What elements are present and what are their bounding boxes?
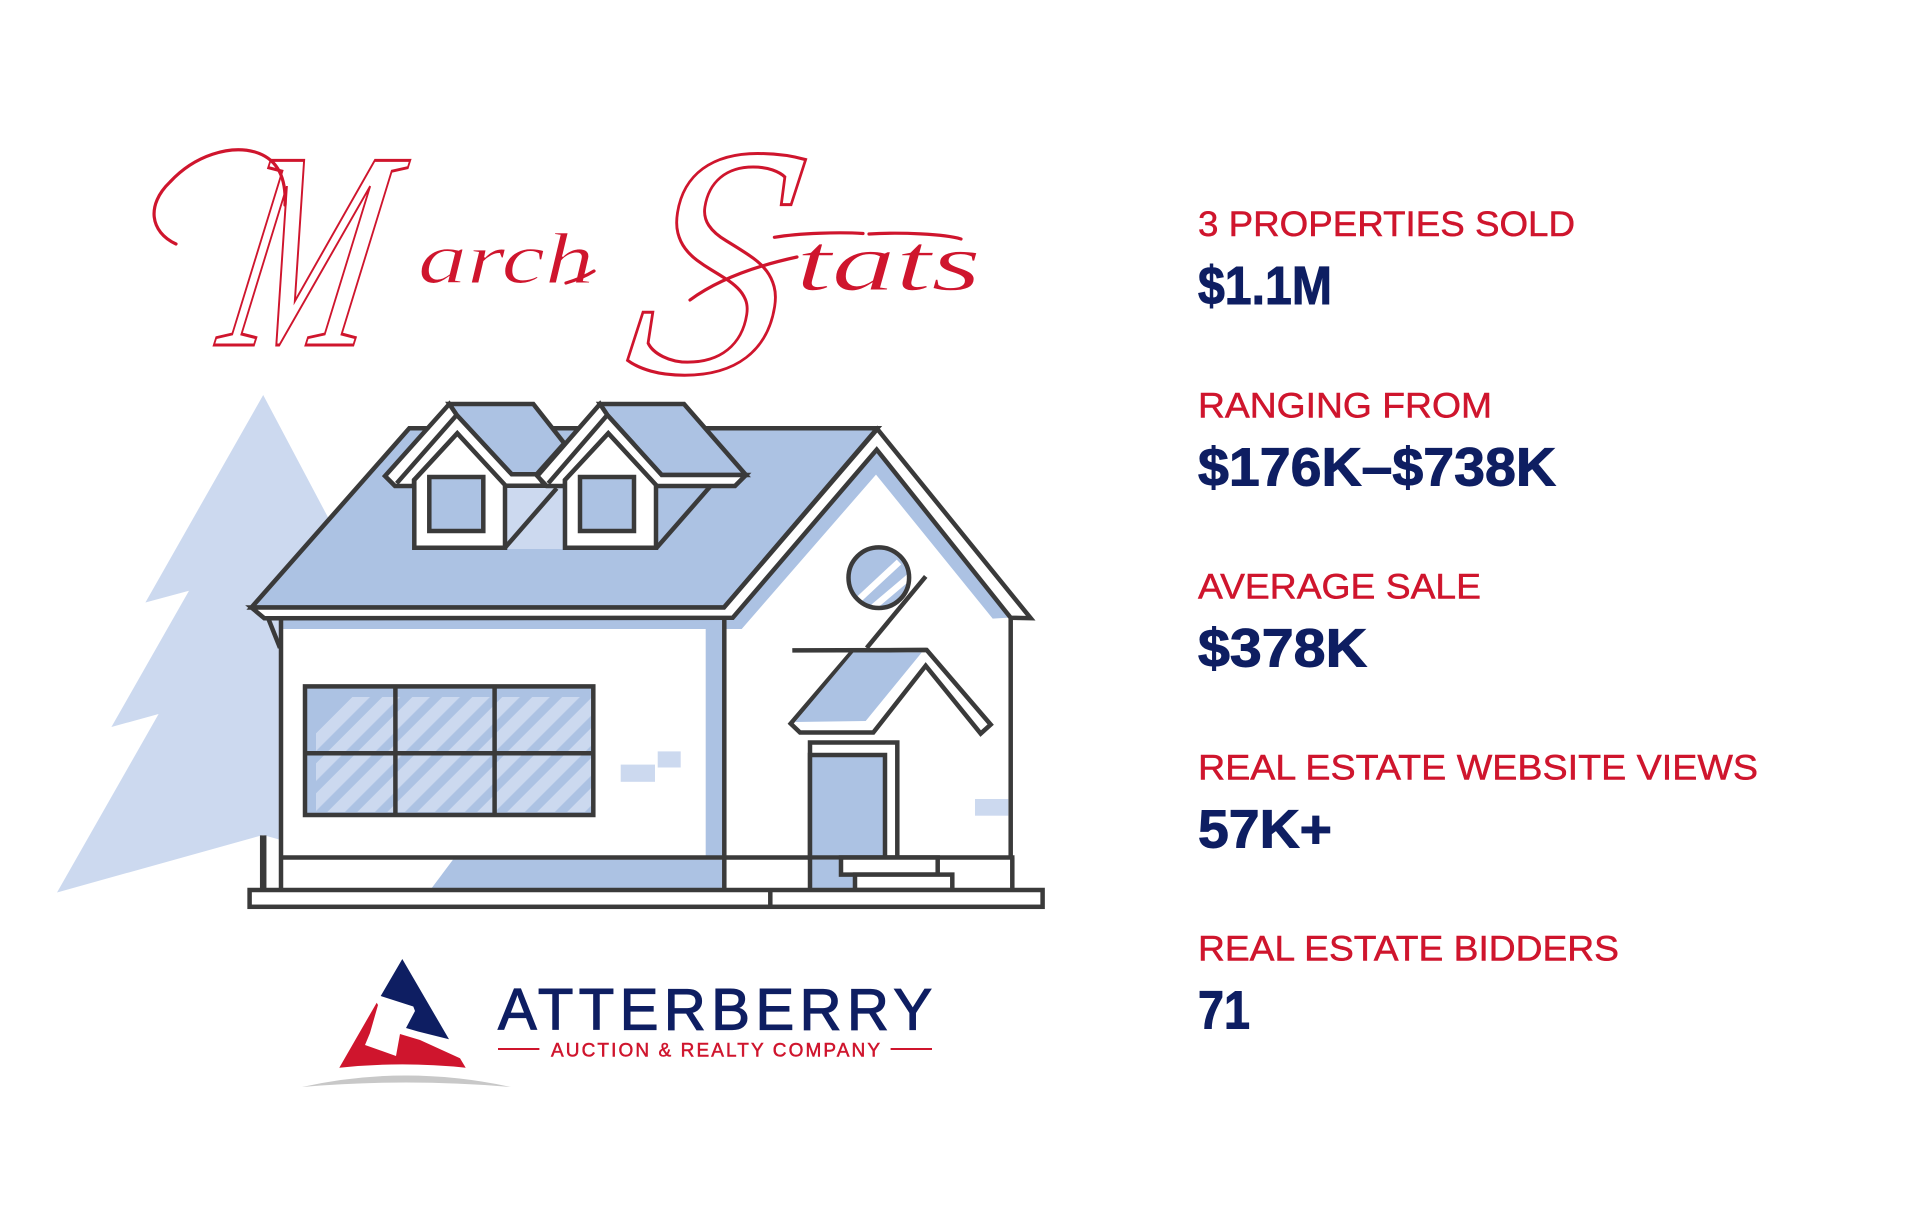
stat: average sale bbox=[1198, 567, 1481, 679]
walls and lines bbox=[269, 576, 1015, 890]
stat: properties sold: 3 PROPERTIES SOLD bbox=[1198, 204, 1575, 244]
gable shadow bbox=[726, 450, 1011, 629]
main roof bbox=[251, 428, 877, 608]
eave band bbox=[251, 429, 1031, 618]
downspout bbox=[260, 835, 266, 890]
foundation fill bbox=[431, 860, 724, 889]
right dormer window bbox=[580, 477, 634, 531]
stat: bidders: 71 bbox=[1198, 980, 1250, 1040]
light patch beside dormer bbox=[505, 488, 563, 549]
illustration: pine tree bbox=[57, 395, 340, 892]
stat: average sale: $378K bbox=[1198, 619, 1367, 679]
stat: bidders: REAL ESTATE BIDDERS bbox=[1198, 929, 1619, 969]
left dormer face bbox=[414, 433, 505, 548]
left dormer window bbox=[429, 477, 483, 531]
stat: website views: REAL ESTATE WEBSITE VIEWS bbox=[1198, 747, 1758, 787]
stat: website views bbox=[1198, 747, 1758, 859]
right dormer trim bbox=[537, 404, 746, 486]
logo: Atterberry bbox=[302, 959, 932, 1087]
stat: price range: $176K–$738K bbox=[1198, 438, 1556, 498]
logo mark bbox=[302, 959, 511, 1087]
round window bbox=[846, 545, 912, 610]
title letter M: M bbox=[201, 93, 425, 406]
door bbox=[810, 742, 897, 890]
steps bbox=[841, 858, 952, 890]
base slab bbox=[250, 890, 1043, 907]
stat: properties sold: $1.1M bbox=[1198, 256, 1332, 316]
left wall bbox=[281, 618, 724, 858]
title letter S: S bbox=[611, 78, 824, 444]
stat: price range: RANGING FROM bbox=[1198, 385, 1492, 425]
stat: average sale: AVERAGE SALE bbox=[1198, 567, 1481, 607]
stat: price range bbox=[1198, 385, 1556, 498]
left dormer trim bbox=[385, 404, 545, 486]
stat: website views: 57K+ bbox=[1198, 799, 1332, 859]
stat: bidders bbox=[1198, 929, 1619, 1040]
stat: properties sold bbox=[1198, 204, 1575, 316]
right dormer face bbox=[565, 433, 656, 548]
right dormer bbox=[537, 404, 746, 548]
gable wall bbox=[724, 450, 1011, 889]
bricks bbox=[621, 751, 1008, 816]
title: March Stats bbox=[154, 78, 981, 444]
logo tagline: AUCTION & REALTY COMPANY bbox=[551, 1041, 880, 1062]
left dormer roof bbox=[449, 404, 564, 474]
title swashes bbox=[154, 150, 961, 300]
title letters arch: arch bbox=[418, 219, 594, 299]
porch roof bbox=[791, 650, 991, 734]
large window bbox=[305, 686, 593, 815]
illustration: house bbox=[250, 404, 1043, 907]
left dormer bbox=[385, 404, 564, 548]
wall shadow bbox=[281, 620, 724, 858]
logo name: ATTERBERRY bbox=[498, 977, 932, 1042]
title letters tats: tats bbox=[796, 217, 981, 308]
right dormer roof bbox=[600, 404, 746, 475]
